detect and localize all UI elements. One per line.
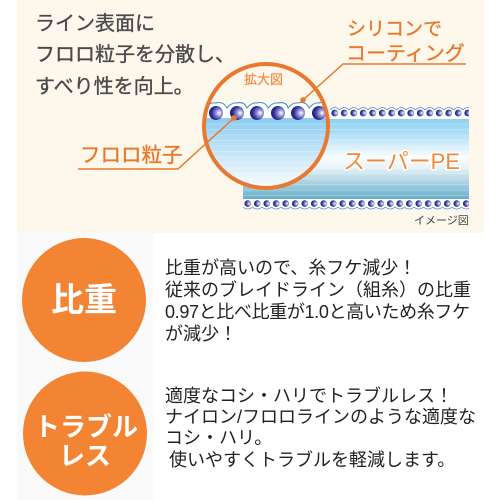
label: magnified view: 拡大図: [244, 72, 283, 87]
callout: fluoro particles: [78, 115, 237, 169]
heading: line surface description: ライン表面に: [35, 12, 155, 35]
panel: trouble-less badge: トラブル: [34, 412, 138, 442]
text block: specific gravity: [165, 258, 471, 344]
text block: trouble-less: 使いやすくトラブルを軽減します。: [169, 449, 455, 470]
text block: trouble-less: 適度なコシ・ハリでトラブルレス！: [165, 385, 453, 406]
text block: trouble-less: ナイロン/フロロラインのような適度な: [165, 407, 476, 427]
text block: specific gravity: 従来のブレイドライン（組糸）の比重: [165, 279, 471, 300]
label: Super PE: スーパーPE: [343, 149, 460, 174]
panel: trouble-less badge: レス: [59, 441, 111, 471]
callout: silicon coating: [300, 19, 466, 103]
diagram: Super PE line band: [243, 107, 469, 210]
heading: line surface description: フロロ粒子を分散し、: [35, 43, 235, 66]
panel: specific gravity badge: [17, 233, 153, 369]
panel: specific gravity badge: 比重: [51, 281, 117, 318]
text block: specific gravity: 0.97と比べ比重が1.0と高いため糸フケ: [165, 302, 470, 322]
magnified circle: [200, 64, 332, 191]
callout: silicon coating: コーティング: [346, 42, 465, 65]
panel: cream diagram background: [17, 0, 484, 233]
caption: image only: イメージ図: [414, 214, 469, 227]
callout: silicon coating: シリコンで: [347, 19, 442, 40]
panel: trouble-less badge: [17, 369, 153, 500]
text block: specific gravity: 比重が高いので、糸フケ減少！: [165, 258, 416, 278]
heading: line surface description: [35, 12, 235, 98]
text block: specific gravity: が減少！: [165, 324, 237, 344]
callout: fluoro particles: フロロ粒子: [80, 144, 182, 167]
text block: trouble-less: コシ・ハリ。: [165, 428, 272, 448]
text block: trouble-less: [165, 385, 476, 470]
heading: line surface description: すべり性を向上。: [35, 75, 194, 98]
